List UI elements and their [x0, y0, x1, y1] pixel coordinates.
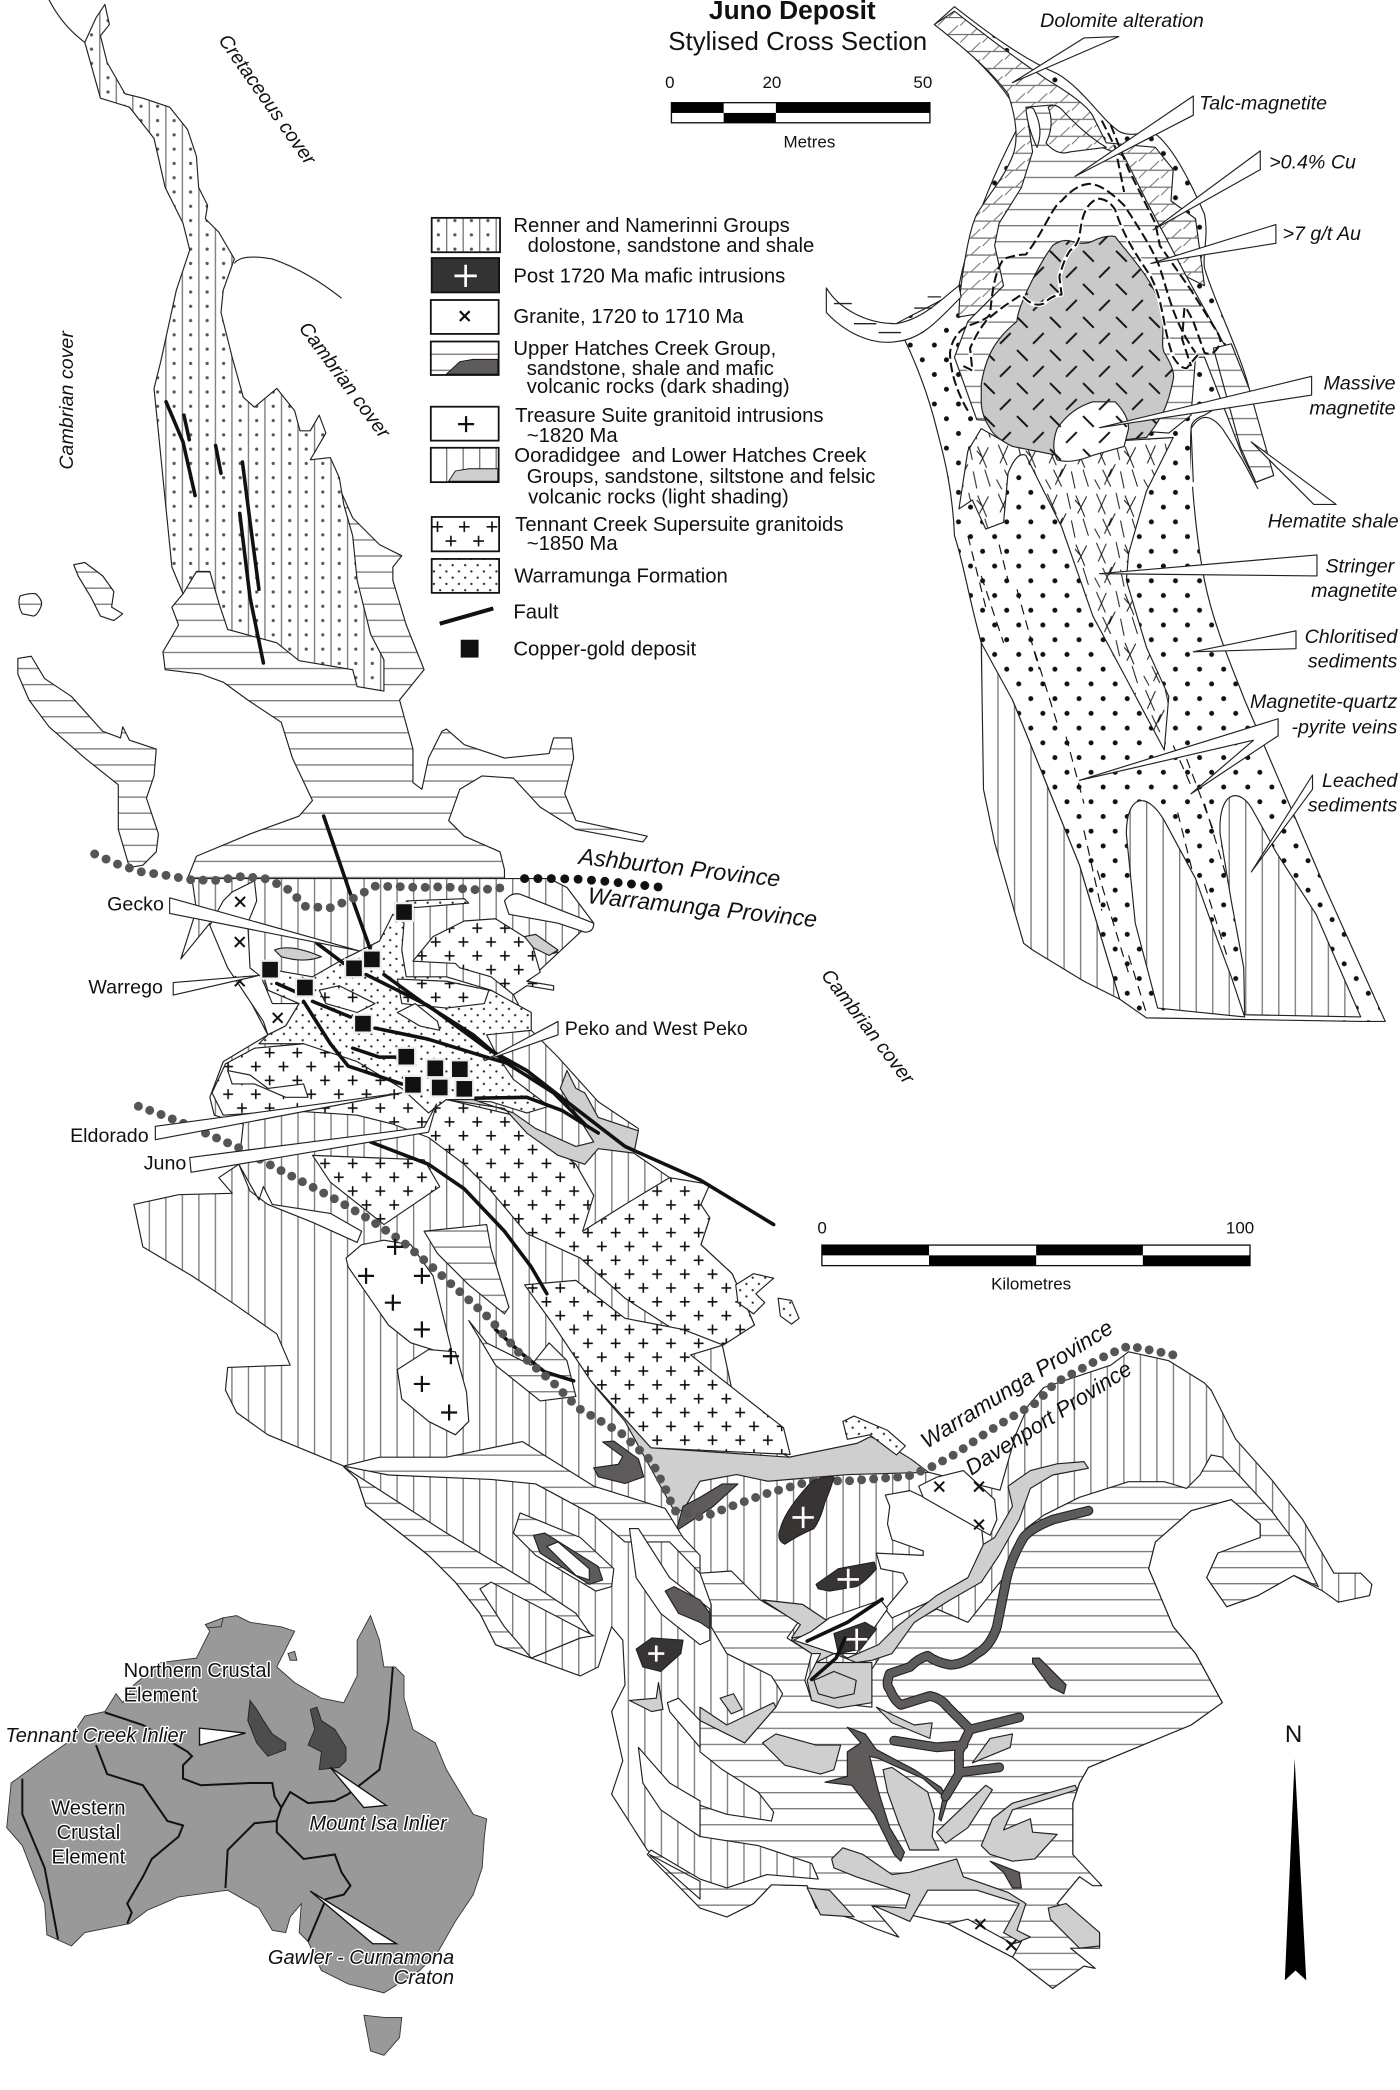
Upper Hatches Creek Group, south-east — [647, 1455, 1318, 1988]
legend swatch: Renner and Namerinni — [432, 218, 500, 252]
legend swatch: Warramunga — [432, 559, 499, 593]
deposit labels: Juno — [144, 1153, 186, 1175]
inset labels: Element — [124, 1684, 198, 1706]
scale bar: kilometres: 0 — [817, 1218, 827, 1237]
legend swatch: deposit — [461, 640, 479, 658]
copper-gold deposits — [261, 903, 473, 1098]
cover labels: Cambrian cover — [56, 330, 78, 470]
white fingers in dolomite — [1026, 108, 1040, 147]
cross section labels: Dolomite alteration — [1040, 10, 1204, 32]
inset callouts — [200, 1728, 396, 1944]
cross section labels: Talc-magnetite — [1199, 92, 1327, 114]
Mount Isa Inlier — [308, 1707, 346, 1770]
legend text: volcanic rocks (dark shading) — [527, 376, 790, 398]
legend text: Renner and Namerinni Groups — [513, 215, 790, 237]
inset labels: Crustal — [57, 1822, 120, 1844]
stringer magnetite zone — [959, 429, 1173, 750]
province labels — [576, 843, 1136, 1480]
small stipple island north — [406, 899, 469, 908]
legend swatch: granite — [431, 300, 499, 334]
lower vertical-lined host and lobes — [981, 643, 1361, 1017]
boundary: Ashburton and Warramunga province dotted line — [95, 854, 663, 908]
legend swatch: Upper Hatches Creek — [431, 342, 499, 375]
Tennant Creek Inlier — [248, 1700, 286, 1756]
cross section labels: >7 g/t Au — [1283, 223, 1361, 245]
deposit labels: Eldorado — [70, 1125, 149, 1147]
>7 g/t Au and >0.4% Cu dashed boundaries — [950, 121, 1221, 411]
inset labels: Craton — [394, 1967, 454, 1989]
legend swatch: Tennant Creek Supersuite — [432, 517, 499, 551]
Warramunga Formation — [259, 914, 549, 1113]
talc-magnetite horizontal lined zone — [954, 105, 1274, 482]
legend swatch: Treasure Suite — [431, 407, 499, 441]
legend — [431, 215, 875, 660]
cross section labels: Chloritised — [1305, 626, 1398, 648]
cross section labels: Magnetite-quartz — [1250, 691, 1398, 713]
panel: cross section of Juno Deposit — [826, 7, 1399, 1021]
unit: Renner and Namerinni Groups — [85, 4, 384, 691]
deposit labels — [70, 894, 748, 1175]
callouts: cross section pointers — [1013, 37, 1336, 872]
cross section labels: magnetite — [1311, 580, 1397, 602]
province labels: Warramunga Province — [587, 882, 818, 932]
unit: Upper Hatches Creek Group, northern belt — [163, 477, 647, 883]
cross section labels: Hematite shale — [1268, 511, 1399, 533]
massive magnetite grey zone — [981, 236, 1174, 455]
cross section labels: >0.4% Cu — [1269, 152, 1356, 174]
legend swatch: mafic intrusions — [432, 258, 499, 292]
inset labels: Mount Isa Inlier — [309, 1813, 448, 1835]
panel: Australia inset map — [5, 1616, 487, 2055]
legend text: Post 1720 Ma mafic intrusions — [513, 266, 785, 288]
cover labels: Cambrian cover — [817, 965, 919, 1090]
scale bar: metres: Metres — [783, 132, 835, 151]
white lobes over volcanic unit — [239, 894, 594, 1435]
legend text: volcanic rocks (light shading) — [528, 487, 789, 509]
fault lines, central — [277, 816, 774, 1381]
cross section labels: sediments — [1308, 795, 1398, 817]
panel: Davenport province units — [647, 1455, 1318, 1988]
legend swatch: Ooradidgee — [431, 448, 499, 482]
province labels: Warramunga Province — [916, 1315, 1117, 1453]
panel: south-west map belt — [344, 1442, 710, 1899]
deposit labels: Gecko — [107, 894, 164, 916]
light grey felsic volcanics — [763, 1734, 1100, 1948]
scale bar: metres: 50 — [913, 73, 932, 92]
inset labels: Tennant Creek Inlier — [5, 1725, 187, 1747]
legend text: Warramunga Formation — [514, 566, 728, 588]
faults south-east — [807, 1599, 882, 1679]
province labels: Davenport Province — [961, 1356, 1136, 1480]
legend text: Upper Hatches Creek Group, — [513, 338, 776, 360]
white ground and volcanic strips — [700, 1462, 1088, 1743]
callouts: deposit names — [155, 898, 558, 1172]
left tail — [826, 286, 961, 342]
chloritised sediments dotted body — [896, 7, 1385, 1021]
deposit labels: Peko and West Peko — [565, 1018, 748, 1040]
cover labels — [56, 30, 919, 1090]
scale bar: metres: 20 — [763, 73, 781, 92]
mafic intrusion — [636, 1638, 683, 1671]
cross section labels — [1040, 10, 1399, 817]
faults in Renner and Namerinni Groups — [166, 402, 263, 663]
rivers and islands of north — [18, 0, 342, 867]
legend text: Groups, sandstone, siltstone and felsic — [527, 466, 875, 488]
north arrow: N — [1285, 1721, 1302, 1748]
inset labels: Western — [51, 1797, 126, 1819]
dark mafic volcanics — [825, 1511, 1088, 1888]
legend text: Copper-gold deposit — [513, 638, 697, 660]
legend text: Treasure Suite granitoid intrusions — [515, 405, 824, 427]
scale bar: kilometres — [817, 1218, 1254, 1293]
province labels: Ashburton Province — [576, 843, 782, 892]
plus symbols on Treasure Suite granitoids — [358, 1239, 459, 1421]
granite crosses — [934, 1482, 1021, 1957]
cross section labels: Stringer — [1325, 555, 1396, 577]
unit: Ooradidgee and Lower Hatches Creek Groups — [134, 879, 1372, 1988]
legend text: ~1820 Ma — [527, 425, 618, 447]
title: Juno Deposit — [668, 0, 927, 56]
strips of Upper Hatches Creek Group — [344, 1442, 710, 1899]
dolomite alteration band — [934, 11, 1204, 317]
Australia landmass — [7, 1616, 487, 2055]
cross section labels: Leached — [1322, 770, 1398, 792]
cross section labels: sediments — [1308, 650, 1398, 672]
boundary: Warramunga and Davenport province dotted line — [138, 1106, 1183, 1517]
inset labels — [5, 1660, 454, 1989]
scale bar: metres — [665, 73, 932, 151]
inset labels: Element — [52, 1846, 126, 1868]
light grey felsic volcanics along faults — [275, 934, 929, 1531]
cross section labels: -pyrite veins — [1292, 716, 1398, 738]
granite 1720 to 1710 Ma with cross symbols — [210, 881, 299, 1035]
title: Juno Deposit: Stylised Cross Section — [668, 28, 927, 56]
hematite shale — [1213, 344, 1274, 482]
Tennant Creek Supersuite granitoids — [212, 919, 790, 1454]
vein dashes — [968, 536, 1231, 1013]
inset labels: Northern Crustal — [124, 1660, 271, 1682]
legend swatch: fault — [440, 608, 493, 624]
legend text: dolostone, sandstone and shale — [528, 235, 814, 257]
cover labels: Cambrian cover — [294, 318, 395, 444]
legend text: Fault — [513, 601, 559, 623]
deposit labels: Warrego — [88, 976, 163, 998]
legend text: ~1850 Ma — [527, 533, 618, 555]
legend text: sandstone, shale and mafic — [527, 358, 774, 380]
post 1720 Ma mafic intrusions with white plus — [779, 1477, 876, 1654]
crustal element boundaries — [22, 1667, 393, 1942]
legend text: Tennant Creek Supersuite granitoids — [515, 514, 844, 536]
legend text: Ooradidgee and Lower Hatches Creek — [514, 445, 867, 467]
scale bar: kilometres: 100 — [1226, 1218, 1254, 1237]
white bay — [1191, 417, 1258, 491]
scale bar: metres: 0 — [665, 73, 675, 92]
legend text: Granite, 1720 to 1710 Ma — [513, 306, 744, 328]
stipple lobe and island east — [736, 1274, 799, 1324]
legend text — [513, 215, 875, 660]
massive magnetite white lens — [1054, 402, 1129, 461]
cross section labels: Massive — [1324, 372, 1396, 394]
cross section labels: magnetite — [1309, 397, 1396, 419]
cover labels: Cretaceous cover — [214, 30, 321, 170]
north arrow — [1285, 1721, 1306, 1980]
inset labels: Gawler - Curnamona — [268, 1947, 454, 1969]
scale bar: kilometres: Kilometres — [991, 1274, 1071, 1293]
